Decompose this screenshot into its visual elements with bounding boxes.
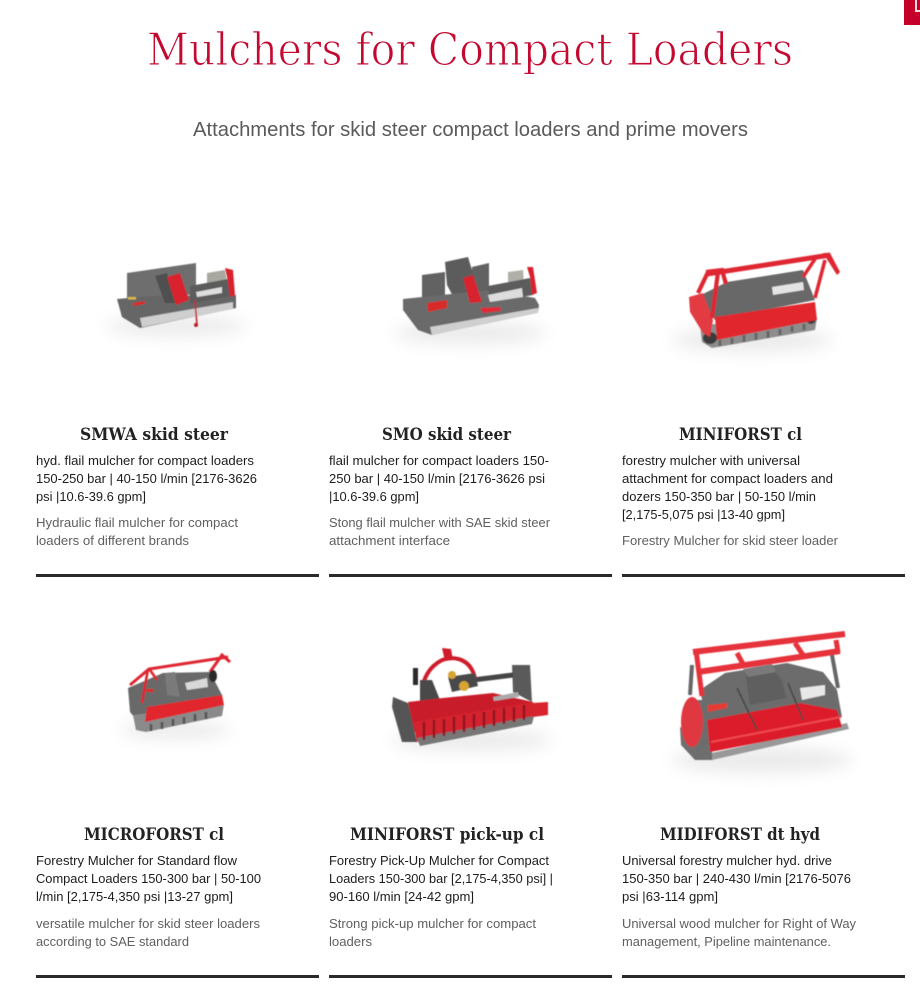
specs bbox=[329, 454, 549, 504]
description bbox=[622, 917, 857, 949]
description bbox=[36, 516, 239, 548]
specs: l/min [2,175-4,350 psi |13-27 gpm] bbox=[36, 890, 233, 904]
panel: MIDIFORST dt hyd bbox=[622, 634, 905, 978]
panel: SMWA skid steer bbox=[36, 263, 319, 577]
specs: Forestry Pick-Up Mulcher for Compact bbox=[329, 854, 550, 868]
specs bbox=[622, 454, 833, 522]
description bbox=[329, 516, 550, 548]
specs: Loaders 150-300 bar [2,175-4,350 psi] | bbox=[329, 872, 553, 886]
description: Universal wood mulcher for Right of Way bbox=[622, 917, 857, 931]
heading: MINIFORST cl bbox=[679, 425, 802, 445]
corner tab bbox=[904, 0, 920, 25]
specs: 90-160 l/min [24-42 gpm] bbox=[329, 890, 474, 904]
description: according to SAE standard bbox=[36, 935, 189, 949]
specs: hyd. flail mulcher for compact loaders bbox=[36, 454, 254, 468]
specs: dozers 150-350 bar | 50-150 l/min bbox=[622, 490, 816, 504]
specs: |10.6-39.6 gpm] bbox=[329, 490, 419, 504]
description: versatile mulcher for skid steer loaders bbox=[36, 917, 260, 931]
icon: SMWA mulcher bbox=[106, 263, 246, 336]
specs bbox=[622, 854, 851, 904]
icon: MICROFORST cl mulcher bbox=[120, 655, 230, 739]
specs: 150-250 bar | 40-150 l/min [2176-3626 bbox=[36, 472, 257, 486]
title: Mulchers for Compact Loaders bbox=[147, 23, 793, 76]
specs: flail mulcher for compact loaders 150- bbox=[329, 454, 549, 468]
description: Strong pick-up mulcher for compact bbox=[329, 917, 537, 931]
description bbox=[329, 917, 537, 949]
subtitle: Attachments for skid steer compact loaders and prime movers bbox=[193, 119, 748, 141]
description: management, Pipeline maintenance. bbox=[622, 935, 831, 949]
specs bbox=[36, 454, 257, 504]
heading: MINIFORST pick-up cl bbox=[350, 825, 544, 845]
specs: attachment for compact loaders and bbox=[622, 472, 833, 486]
description: loaders of different brands bbox=[36, 534, 189, 548]
description: Stong flail mulcher with SAE skid steer bbox=[329, 516, 550, 530]
panel: MINIFORST pick-up cl bbox=[329, 648, 612, 978]
description: attachment interface bbox=[329, 534, 450, 548]
specs: Compact Loaders 150-300 bar | 50-100 bbox=[36, 872, 261, 886]
heading: MICROFORST cl bbox=[84, 825, 224, 845]
heading: MIDIFORST dt hyd bbox=[660, 825, 820, 845]
specs: Forestry Mulcher for Standard flow bbox=[36, 854, 238, 868]
specs: Universal forestry mulcher hyd. drive bbox=[622, 854, 832, 868]
specs bbox=[329, 854, 553, 904]
specs: forestry mulcher with universal bbox=[622, 454, 800, 468]
description bbox=[36, 917, 260, 949]
heading: SMO skid steer bbox=[382, 425, 512, 445]
heading: SMWA skid steer bbox=[80, 425, 229, 445]
description: Hydraulic flail mulcher for compact bbox=[36, 516, 239, 530]
specs: psi |63-114 gpm] bbox=[622, 890, 718, 904]
icon: SMO mulcher bbox=[394, 257, 546, 344]
specs: psi |10.6-39.6 gpm] bbox=[36, 490, 146, 504]
panel: MINIFORST cl bbox=[622, 253, 905, 577]
specs: 250 bar | 40-150 l/min [2176-3626 psi bbox=[329, 472, 545, 486]
panel: MICROFORST cl bbox=[36, 655, 319, 978]
icon: MINIFORST pick-up cl mulcher bbox=[392, 648, 552, 751]
specs: [2,175-5,075 psi |13-40 gpm] bbox=[622, 508, 785, 522]
specs bbox=[36, 854, 261, 904]
icon: MIDIFORST dt hyd mulcher bbox=[672, 634, 852, 773]
panel: SMO skid steer bbox=[329, 257, 612, 577]
icon: MINIFORST cl mulcher bbox=[672, 253, 840, 352]
specs: 150-350 bar | 240-430 l/min [2176-5076 bbox=[622, 872, 851, 886]
description: Forestry Mulcher for skid steer loader bbox=[622, 534, 838, 548]
description: loaders bbox=[329, 935, 372, 949]
